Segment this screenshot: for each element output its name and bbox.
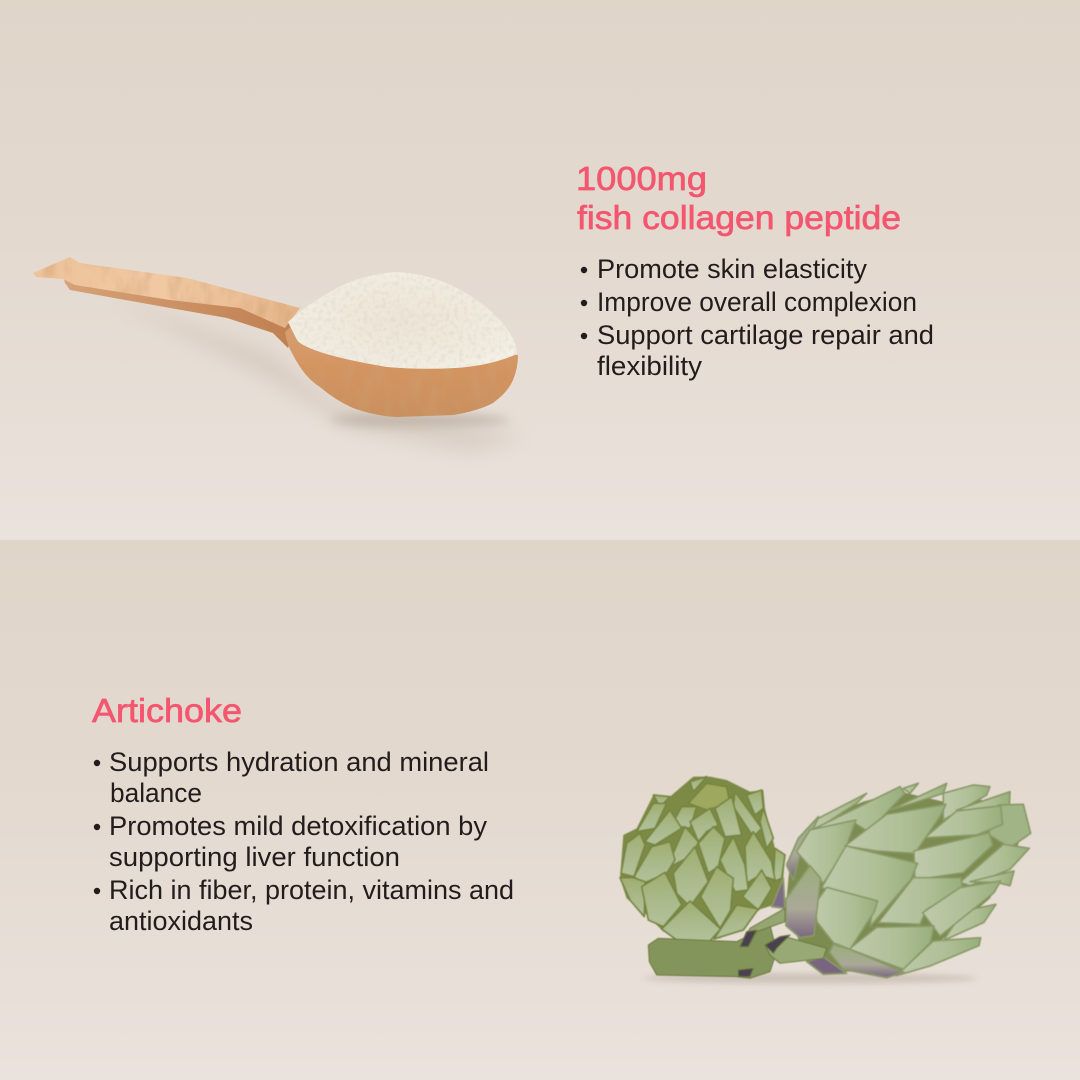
heading: Artichoke: Artichoke — [92, 692, 242, 729]
text block: collagen benefits: Promote skin elasticity — [597, 254, 868, 284]
text block: artichoke benefits: Supports hydration and mineral — [109, 747, 489, 777]
icon: two artichokes — [620, 777, 1031, 984]
text block: collagen benefits — [581, 254, 934, 381]
artichoke ground shadow — [643, 973, 977, 984]
text block: artichoke benefits: supporting liver function — [109, 842, 400, 872]
text block: artichoke benefits: Rich in fiber, protein, vitamins and — [109, 875, 514, 905]
heading: 1000mg fish collagen peptide: fish collagen peptide — [577, 199, 901, 236]
spoon handle underside — [63, 276, 296, 348]
icon: wooden spoon with powder — [33, 257, 525, 452]
text block: collagen benefits: Improve overall complexion — [597, 287, 917, 317]
spoon bowl — [285, 322, 518, 417]
text block: artichoke benefits — [94, 747, 514, 936]
heading: 1000mg fish collagen peptide — [576, 160, 901, 236]
text block: artichoke benefits: balance — [110, 778, 202, 808]
text block: collagen benefits: Support cartilage repair and — [597, 320, 934, 350]
heading: 1000mg fish collagen peptide: 1000mg — [576, 160, 707, 197]
spoon shadow — [110, 298, 525, 452]
artichoke: right head — [772, 783, 1031, 978]
text block: artichoke benefits: antioxidants — [109, 906, 253, 936]
powder heap — [288, 272, 517, 369]
panel: artichoke — [0, 540, 1080, 1080]
artichoke: stem — [648, 908, 827, 978]
panel: fish collagen peptide — [0, 0, 1080, 540]
spoon handle — [33, 257, 300, 328]
artichoke: left head — [620, 777, 785, 941]
text block: artichoke benefits: Promotes mild detoxification by — [109, 811, 488, 841]
text block: collagen benefits: flexibility — [597, 351, 703, 381]
